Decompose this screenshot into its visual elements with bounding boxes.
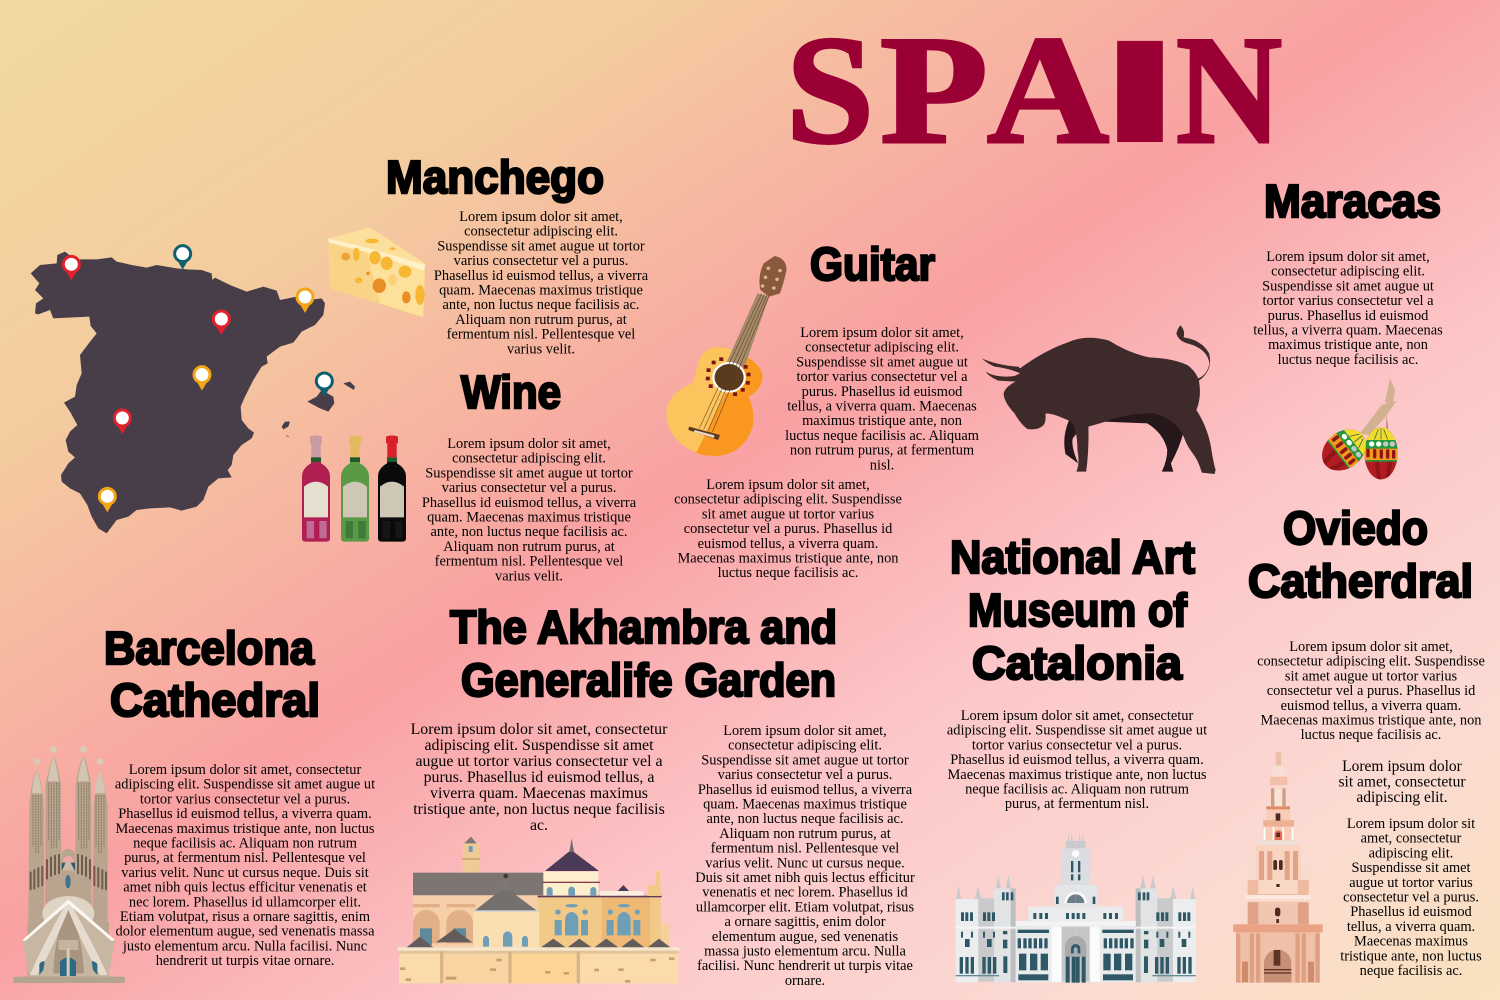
title: A (987, 4, 1109, 176)
panel: oviedo cathedral (1233, 502, 1485, 983)
text block: barcelona: hendrerit ut turpis vitae ornare. (156, 953, 334, 969)
text block: barcelona: nec lorem. Phasellus id ullamcorper elit. (129, 894, 361, 910)
pin: yellow Catalonia (297, 289, 313, 313)
text block: barcelona: Lorem ipsum dolor sit amet, consectetur (129, 762, 362, 778)
text block: oviedo lower: amet, consectetur (1361, 831, 1462, 847)
text block: alhambra left: ac. (530, 817, 548, 834)
text block: manchego: fermentum nisl. Pellentesque vel (447, 327, 635, 343)
text block: barcelona: Maecenas maximus tristique ante, non luctus (116, 821, 375, 837)
title (786, 4, 1282, 176)
icon: wine bottles (302, 435, 406, 542)
text block: guitar: Suspendisse sit amet augue ut (796, 354, 968, 370)
text block: guitar: purus. Phasellus id euismod (802, 384, 963, 400)
text block: alhambra right: varius consectetur vel a purus. (718, 767, 892, 783)
panel: national art museum (947, 531, 1207, 983)
text block: guitar: tellus, a viverra quam. Maecenas (787, 398, 977, 414)
text block: national art museum: Phasellus id euismod tellus, a viverra quam. (950, 752, 1204, 768)
Balearic islands (282, 382, 355, 437)
text block: wine: ante, non luctus neque facilisis ac. (430, 524, 628, 540)
text block: oviedo lower: neque facilisis ac. (1360, 963, 1462, 979)
text block: maracas: maximus tristique ante, non (1268, 337, 1428, 353)
text block: oviedo lower: adipiscing elit. (1369, 845, 1453, 861)
heading: Guitar: Guitar (810, 238, 935, 290)
text block: alhambra right: consectetur adipiscing elit. (728, 738, 882, 754)
icon: palace (956, 832, 1196, 983)
text block: guitar: consectetur adipiscing elit. (805, 340, 959, 356)
heading: The Akhambra and Generalife Garden (450, 601, 837, 706)
text block: wine: Lorem ipsum dolor sit amet, (447, 436, 611, 452)
text block: manchego: consectetur adipiscing elit. (464, 224, 618, 240)
rear far leg and front far leg (1064, 408, 1184, 472)
text block: wine: fermentum nisl. Pellentesque vel (435, 554, 623, 570)
text block: manchego: ante, non luctus neque facilisis ac. (442, 297, 640, 313)
heading: Oviedo Catherdral: Catherdral (1248, 555, 1473, 607)
text block: oviedo lower: consectetur vel a purus. (1343, 890, 1479, 906)
panel: barcelona cathedral (13, 622, 375, 983)
title: S (786, 4, 874, 176)
text block: national art museum: tortor varius consectetur vel a purus. (972, 737, 1182, 753)
bottle: white (341, 435, 369, 542)
text block: alhambra right: ullamcorper elit. Etiam volutpat, risus (696, 899, 914, 915)
map of Spain with pins (31, 246, 355, 533)
text block: oviedo lower: tristique ante, non luctus (1340, 948, 1482, 964)
panel: alhambra (398, 601, 915, 989)
text block: alhambra right: fermentum nisl. Pellentesque vel (711, 841, 899, 857)
heading: National Art Museum of Catalonia: Museum of (968, 584, 1188, 636)
text block: under guitar: luctus neque facilisis ac. (718, 565, 858, 581)
body (982, 325, 1216, 474)
text block: under guitar: consectetur vel a purus. Phasellus id (684, 521, 893, 537)
pin: teal north (175, 246, 191, 270)
text block: manchego: Lorem ipsum dolor sit amet, (459, 209, 623, 225)
text block: alhambra right: a ornare sagittis, enim dolor (724, 914, 886, 930)
panel: guitar (666, 238, 979, 473)
heading: The Akhambra and Generalife Garden: The Akhambra and (450, 601, 837, 653)
text block: guitar: non rutrum purus, at fermentum (790, 443, 974, 459)
text block: maracas: tortor varius consectetur vel a (1262, 293, 1434, 309)
heading: National Art Museum of Catalonia: Catalonia (972, 637, 1182, 689)
text block: oviedo main: consectetur adipiscing elit. Suspendisse (1257, 654, 1485, 670)
heading: Manchego: Manchego (386, 151, 604, 203)
text block: maracas: consectetur adipiscing elit. (1271, 264, 1425, 280)
title: I (1096, 10, 1184, 174)
title: N (1176, 4, 1282, 176)
text block: oviedo main: sit amet augue ut tortor varius (1285, 668, 1458, 684)
text block: alhambra right: quam. Maecenas maximus tristique (703, 796, 907, 812)
text block: guitar: maximus tristique ante, non (802, 413, 962, 429)
icon: bull (982, 325, 1216, 474)
text block: under guitar: euismod tellus, a viverra quam. (698, 536, 878, 552)
text block: barcelona: amet nibh quis lectus efficitur venenatis et (123, 880, 367, 896)
heading: Oviedo Catherdral (1248, 502, 1473, 607)
text block: manchego: varius velit. (507, 341, 575, 357)
text block: national art museum: Maecenas maximus tristique ante, non luctus (948, 767, 1207, 783)
text block: oviedo lower: Lorem ipsum dolor sit (1347, 816, 1475, 832)
text block: alhambra left: augue ut tortor varius consectetur vel a (415, 753, 663, 770)
text block: wine: Aliquam non rutrum purus, at (443, 539, 615, 555)
bottle: red (378, 435, 406, 542)
title: P (880, 4, 988, 176)
text block: barcelona: adipiscing elit. Suspendisse sit amet augue ut (115, 777, 375, 793)
text block: oviedo lower: Maecenas maximus (1354, 934, 1468, 950)
bottle: rose (302, 435, 330, 542)
text block: national art museum: purus, at fermentum nisl. (1005, 796, 1149, 812)
heading: National Art Museum of Catalonia (950, 531, 1195, 689)
text block: oviedo main: Lorem ipsum dolor sit amet, (1289, 639, 1453, 655)
text block: alhambra right: massa justo elementum arcu. Nulla (704, 944, 907, 960)
heading: Barcelona Cathedral: Barcelona (104, 622, 314, 674)
icon: maracas (1313, 378, 1398, 481)
heading: Wine: Wine (461, 366, 561, 418)
text block: oviedo main: luctus neque facilisis ac. (1301, 727, 1441, 743)
text block: alhambra right: facilisi. Nunc hendrerit ut turpis vitae (697, 958, 913, 974)
text block: guitar: nisl. (870, 457, 894, 473)
text block: manchego: Aliquam non rutrum purus, at (455, 312, 627, 328)
text block: barcelona: purus, at fermentum nisl. Pellentesque vel (124, 850, 366, 866)
text block: alhambra left: Lorem ipsum dolor sit amet, consectetur (411, 721, 668, 738)
text block: oviedo lower: Suspendisse sit amet (1351, 860, 1471, 876)
heading: Oviedo Catherdral: Oviedo (1283, 502, 1428, 554)
text block: oviedo lower: augue ut tortor varius (1349, 875, 1473, 891)
text block: maracas: Lorem ipsum dolor sit amet, (1266, 249, 1430, 265)
text block: manchego: varius consectetur vel a purus. (454, 253, 628, 269)
pin: yellow centre (194, 367, 210, 391)
text block: alhambra right: Suspendisse sit amet augue ut tortor (701, 752, 909, 768)
text block: alhambra right: Aliquam non rutrum purus, at (719, 826, 891, 842)
text block: under guitar: Lorem ipsum dolor sit amet, (706, 477, 870, 493)
text block: national art museum: neque facilisis ac. Aliquam non rutrum (965, 782, 1189, 798)
text block: alhambra left: tristique ante, non luctus neque facilisis (413, 801, 665, 818)
text block: guitar: tortor varius consectetur vel a (796, 369, 968, 385)
text block: oviedo short: adipiscing elit. (1356, 789, 1448, 806)
text block: alhambra left: purus. Phasellus id euismod tellus, a (424, 769, 654, 786)
pin: red Galicia (63, 256, 79, 280)
heading: Maracas: Maracas (1264, 175, 1441, 227)
pin: yellow south (99, 488, 115, 512)
pin: red north centre (213, 311, 229, 335)
heading: Barcelona Cathedral (104, 622, 320, 726)
icon: tower (1233, 752, 1323, 983)
text block: wine: Suspendisse sit amet augue ut tortor (425, 465, 633, 481)
text block: manchego: quam. Maecenas maximus tristique (439, 282, 643, 298)
text block: under guitar: sit amet augue ut tortor varius (702, 506, 875, 522)
text block: alhambra left: adipiscing elit. Suspendisse sit amet (424, 737, 654, 754)
heading: National Art Museum of Catalonia: National Art (950, 531, 1195, 583)
pin: teal islands (316, 373, 332, 397)
panel: wine (302, 366, 637, 584)
text block: oviedo main: Maecenas maximus tristique ante, non (1260, 712, 1482, 728)
text block: oviedo lower: tellus, a viverra quam. (1347, 919, 1475, 935)
text block: maracas: tellus, a viverra quam. Maecenas (1253, 322, 1443, 338)
text block: barcelona: Etiam volutpat, risus a ornare sagittis, enim (120, 909, 370, 925)
text block: alhambra right: Duis sit amet nibh quis lectus efficitur (695, 870, 915, 886)
icon: cheese (328, 227, 426, 317)
text block: oviedo main: consectetur vel a purus. Phasellus id (1267, 683, 1476, 699)
icon: guitar (666, 256, 787, 456)
text block: alhambra right: venenatis et nec lorem. Phasellus id (702, 885, 909, 901)
text block: alhambra right: Phasellus id euismod tellus, a viverra (698, 782, 913, 798)
text block: wine: Phasellus id euismod tellus, a viverra (422, 495, 637, 511)
text block: barcelona: Phasellus id euismod tellus, a viverra quam. (118, 806, 372, 822)
text block: alhambra right: elementum augue, sed venenatis (712, 929, 899, 945)
text block: barcelona: dolor elementum augue, sed venenatis massa (116, 924, 375, 940)
text block: alhambra right: Lorem ipsum dolor sit amet, (723, 723, 887, 739)
mainland (31, 252, 325, 533)
text block: oviedo main: euismod tellus, a viverra quam. (1281, 698, 1461, 714)
text block: under guitar: consectetur adipiscing elit. Suspendisse (674, 492, 902, 508)
text block: oviedo short: Lorem ipsum dolor (1342, 758, 1463, 775)
text block: maracas: Suspendisse sit amet augue ut (1262, 278, 1434, 294)
text block: wine: consectetur adipiscing elit. (452, 451, 606, 467)
text block: under guitar: Maecenas maximus tristique ante, non (678, 550, 898, 566)
text block: wine: varius velit. (495, 568, 563, 584)
text block: wine: varius consectetur vel a purus. (442, 480, 616, 496)
text block: guitar: Lorem ipsum dolor sit amet, (800, 325, 964, 341)
text block: wine: quam. Maecenas maximus tristique (427, 510, 631, 526)
text block: manchego: Suspendisse sit amet augue ut tortor (437, 238, 645, 254)
text block: alhambra right: ornare. (785, 973, 825, 989)
text block: manchego: Phasellus id euismod tellus, a viverra (434, 268, 649, 284)
pin: red west (114, 410, 130, 434)
text block: alhambra right: varius velit. Nunc ut cursus neque. (705, 855, 905, 871)
text block: barcelona: tortor varius consectetur vel a purus. (140, 791, 350, 807)
text block: barcelona: neque facilisis ac. Aliquam non rutrum (133, 836, 357, 852)
text block: maracas: purus. Phasellus id euismod (1268, 308, 1429, 324)
text block: barcelona: varius velit. Nunc ut cursus neque. Duis sit (121, 865, 369, 881)
text block: oviedo lower: Phasellus id euismod (1350, 904, 1473, 920)
text block: barcelona: justo elementum arcu. Nulla facilisi. Nunc (122, 938, 367, 954)
text block: alhambra left: viverra quam. Maecenas maximus (430, 785, 648, 802)
heading: The Akhambra and Generalife Garden: Generalife Garden (461, 654, 836, 706)
text block: maracas: luctus neque facilisis ac. (1278, 352, 1418, 368)
icon: mosque cathedral (398, 837, 680, 983)
text block: alhambra right: ante, non luctus neque facilisis ac. (706, 811, 904, 827)
text block: guitar: luctus neque facilisis ac. Aliquam (785, 428, 979, 444)
text block: oviedo short: sit amet, consectetur (1339, 774, 1466, 790)
heading: Barcelona Cathedral: Cathedral (110, 674, 320, 726)
text block: national art museum: Lorem ipsum dolor sit amet, consectetur (961, 708, 1194, 724)
icon: basilica (13, 746, 125, 983)
panel: maracas (1253, 175, 1443, 481)
text block: national art museum: adipiscing elit. Suspendisse sit amet augue ut (947, 723, 1207, 739)
panel: manchego (328, 151, 649, 357)
